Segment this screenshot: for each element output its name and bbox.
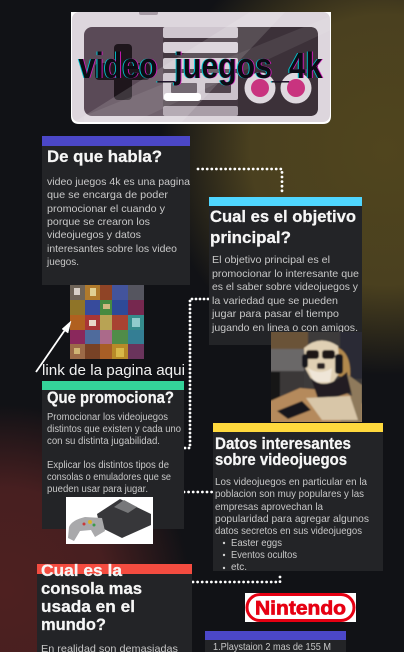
text: que promociona body: distintos que existen y cada uno bbox=[47, 424, 181, 435]
title: video_juegos_4k bbox=[79, 45, 324, 86]
text: objetivo body bbox=[211, 254, 359, 334]
heading: consola mas usada: Cual es la bbox=[41, 561, 123, 580]
heading: consola mas usada: mundo? bbox=[41, 615, 106, 634]
heading: datos interesantes: sobre videojuegos bbox=[215, 450, 347, 469]
heading: objetivo principal: Cual es el objetivo bbox=[210, 207, 356, 226]
heading: consola mas usada bbox=[41, 561, 142, 634]
panel: ranking bbox=[205, 631, 346, 652]
panel: datos interesantes bbox=[213, 423, 383, 573]
panel: consola mas usada bbox=[37, 561, 192, 652]
heading: datos interesantes: Datos interesantes bbox=[215, 434, 351, 453]
panel: de que habla bbox=[42, 136, 190, 285]
text: link de la pagina aqui: link de la pagina aqui bbox=[42, 362, 185, 379]
text: que promociona body bbox=[47, 412, 181, 495]
text: que promociona body: con su distinta jugabilidad. bbox=[47, 436, 160, 447]
list: secrets: Eventos ocultos bbox=[231, 549, 297, 561]
heading: objetivo principal: principal? bbox=[210, 228, 291, 247]
text: de que habla body: juegos. bbox=[46, 256, 79, 268]
arrow: to link bbox=[36, 321, 71, 372]
heading: consola mas usada: usada en el bbox=[41, 597, 135, 616]
text: datos body: Los videojuegos en particular en la bbox=[215, 476, 367, 488]
image: nintendo 64 console bbox=[66, 497, 153, 544]
text: de que habla body: que se encarga de poder bbox=[47, 189, 169, 201]
text: datos body: poblacion son muy populares y las bbox=[215, 488, 364, 500]
text: de que habla body: porque se crearon los bbox=[47, 216, 150, 228]
text: objetivo body: es el saber sobre videojuegos y bbox=[212, 281, 359, 293]
logo: nintendo: Nintendo bbox=[255, 598, 346, 620]
panel: que promociona bbox=[42, 381, 184, 529]
image: dog with headphones and controller bbox=[271, 332, 362, 422]
text: que promociona body: pueden usar para jugar. bbox=[47, 484, 148, 495]
list: secrets: Easter eggs bbox=[231, 537, 282, 549]
list: secrets: etc. bbox=[231, 561, 247, 573]
text: de que habla body: promocionar el cuando y bbox=[47, 203, 166, 215]
text: objetivo body: promocionar lo interesante que bbox=[212, 268, 359, 280]
text: objetivo body: jugando en linea o con amigos. bbox=[211, 322, 358, 334]
list: secrets bbox=[223, 537, 297, 573]
text: que promociona body: consolas o emuladores que se bbox=[47, 472, 171, 483]
text: datos body: empresas aprovechan la bbox=[215, 501, 323, 513]
text: que promociona body: Explicar los distintos tipos de bbox=[47, 460, 169, 471]
heading: de que habla: De que habla? bbox=[47, 147, 162, 166]
text: objetivo body: El objetivo principal es el bbox=[212, 254, 330, 266]
text: de que habla body: video juegos 4k es una pagina bbox=[47, 176, 190, 188]
title: video_juegos_4k bbox=[78, 45, 322, 86]
heading: que promociona: Que promociona? bbox=[47, 388, 174, 407]
text: objetivo body: la variedad que se pueden bbox=[212, 295, 338, 307]
text: objetivo body: jugar para pasar el tiempo bbox=[211, 308, 339, 320]
text: datos body: popularidad para agregar algunos bbox=[215, 513, 369, 525]
heading: consola mas usada: consola mas bbox=[41, 579, 142, 598]
text: de que habla body: videojuegos y datos bbox=[47, 229, 141, 241]
text: que promociona body: Promocionar los videojuegos bbox=[47, 412, 168, 423]
heading: objetivo principal bbox=[210, 207, 356, 247]
panel: objetivo principal bbox=[209, 197, 362, 345]
text: datos body bbox=[215, 476, 369, 537]
icon: game controller bbox=[71, 10, 331, 124]
heading: datos interesantes bbox=[215, 434, 351, 469]
text: datos body: datos secretos en sus videojuegos bbox=[215, 525, 362, 537]
text: de que habla body bbox=[46, 176, 190, 268]
title: video_juegos_4k bbox=[78, 45, 323, 86]
text: de que habla body: interesantes sobre los video bbox=[47, 243, 177, 255]
logo: nintendo bbox=[245, 593, 356, 622]
image: retro game character mosaic bbox=[70, 285, 144, 359]
dotted connectors bbox=[184, 169, 282, 582]
